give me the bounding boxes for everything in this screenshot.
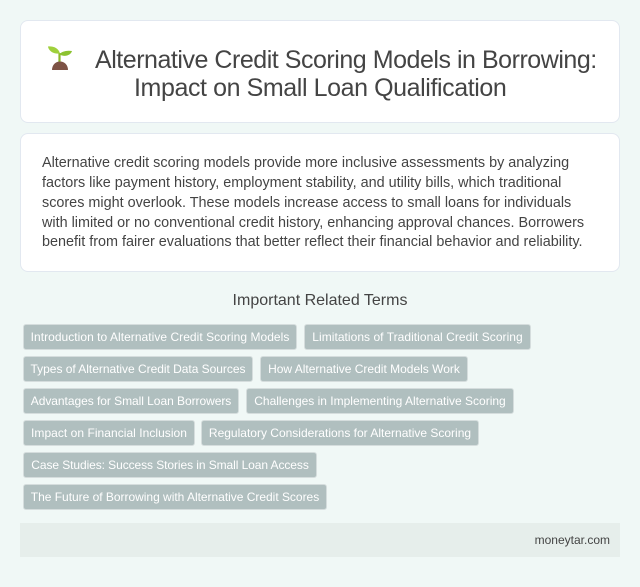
footer source: moneytar.com <box>535 533 610 547</box>
tag: Introduction to Alternative Credit Scoring Models <box>31 330 289 344</box>
tag <box>23 452 317 478</box>
tag: Challenges in Implementing Alternative Scoring <box>254 394 506 408</box>
tag <box>246 388 514 414</box>
tag: Regulatory Considerations for Alternative Scoring <box>209 426 471 440</box>
tag list <box>23 324 531 510</box>
tag <box>260 356 468 382</box>
heading: related terms: Important Related Terms <box>233 292 407 309</box>
tag: Types of Alternative Credit Data Sources <box>31 362 245 376</box>
summary text: scores might overlook. These models increase access to small loans for individuals <box>42 195 571 211</box>
tag <box>23 420 195 446</box>
tag <box>23 484 327 510</box>
tag: Case Studies: Success Stories in Small Loan Access <box>31 458 309 472</box>
tag <box>23 356 253 382</box>
summary text: benefit from fairer evaluations that better reflect their financial behavior and reliability. <box>42 234 582 250</box>
summary text <box>42 155 584 250</box>
title: Impact on Small Loan Qualification <box>134 74 506 102</box>
panel: header <box>20 20 620 123</box>
tag: Limitations of Traditional Credit Scoring <box>312 330 523 344</box>
tag <box>304 324 531 350</box>
summary text: factors like payment history, employment stability, and utility bills, which traditional <box>42 175 561 191</box>
icon: seedling <box>48 46 72 70</box>
tag: Advantages for Small Loan Borrowers <box>31 394 231 408</box>
tag: Impact on Financial Inclusion <box>31 426 187 440</box>
title: Alternative Credit Scoring Models in Borrowing: <box>95 46 597 74</box>
summary text: Alternative credit scoring models provide more inclusive assessments by analyzing <box>42 155 569 171</box>
tag <box>201 420 479 446</box>
tag: How Alternative Credit Models Work <box>268 362 460 376</box>
tag: The Future of Borrowing with Alternative Credit Scores <box>31 490 319 504</box>
panel: summary <box>20 133 620 272</box>
tag <box>23 388 239 414</box>
title <box>95 46 597 102</box>
summary text: with limited or no conventional credit history, enhancing approval chances. Borrowers <box>42 215 584 231</box>
footer <box>20 523 620 557</box>
tag <box>23 324 297 350</box>
